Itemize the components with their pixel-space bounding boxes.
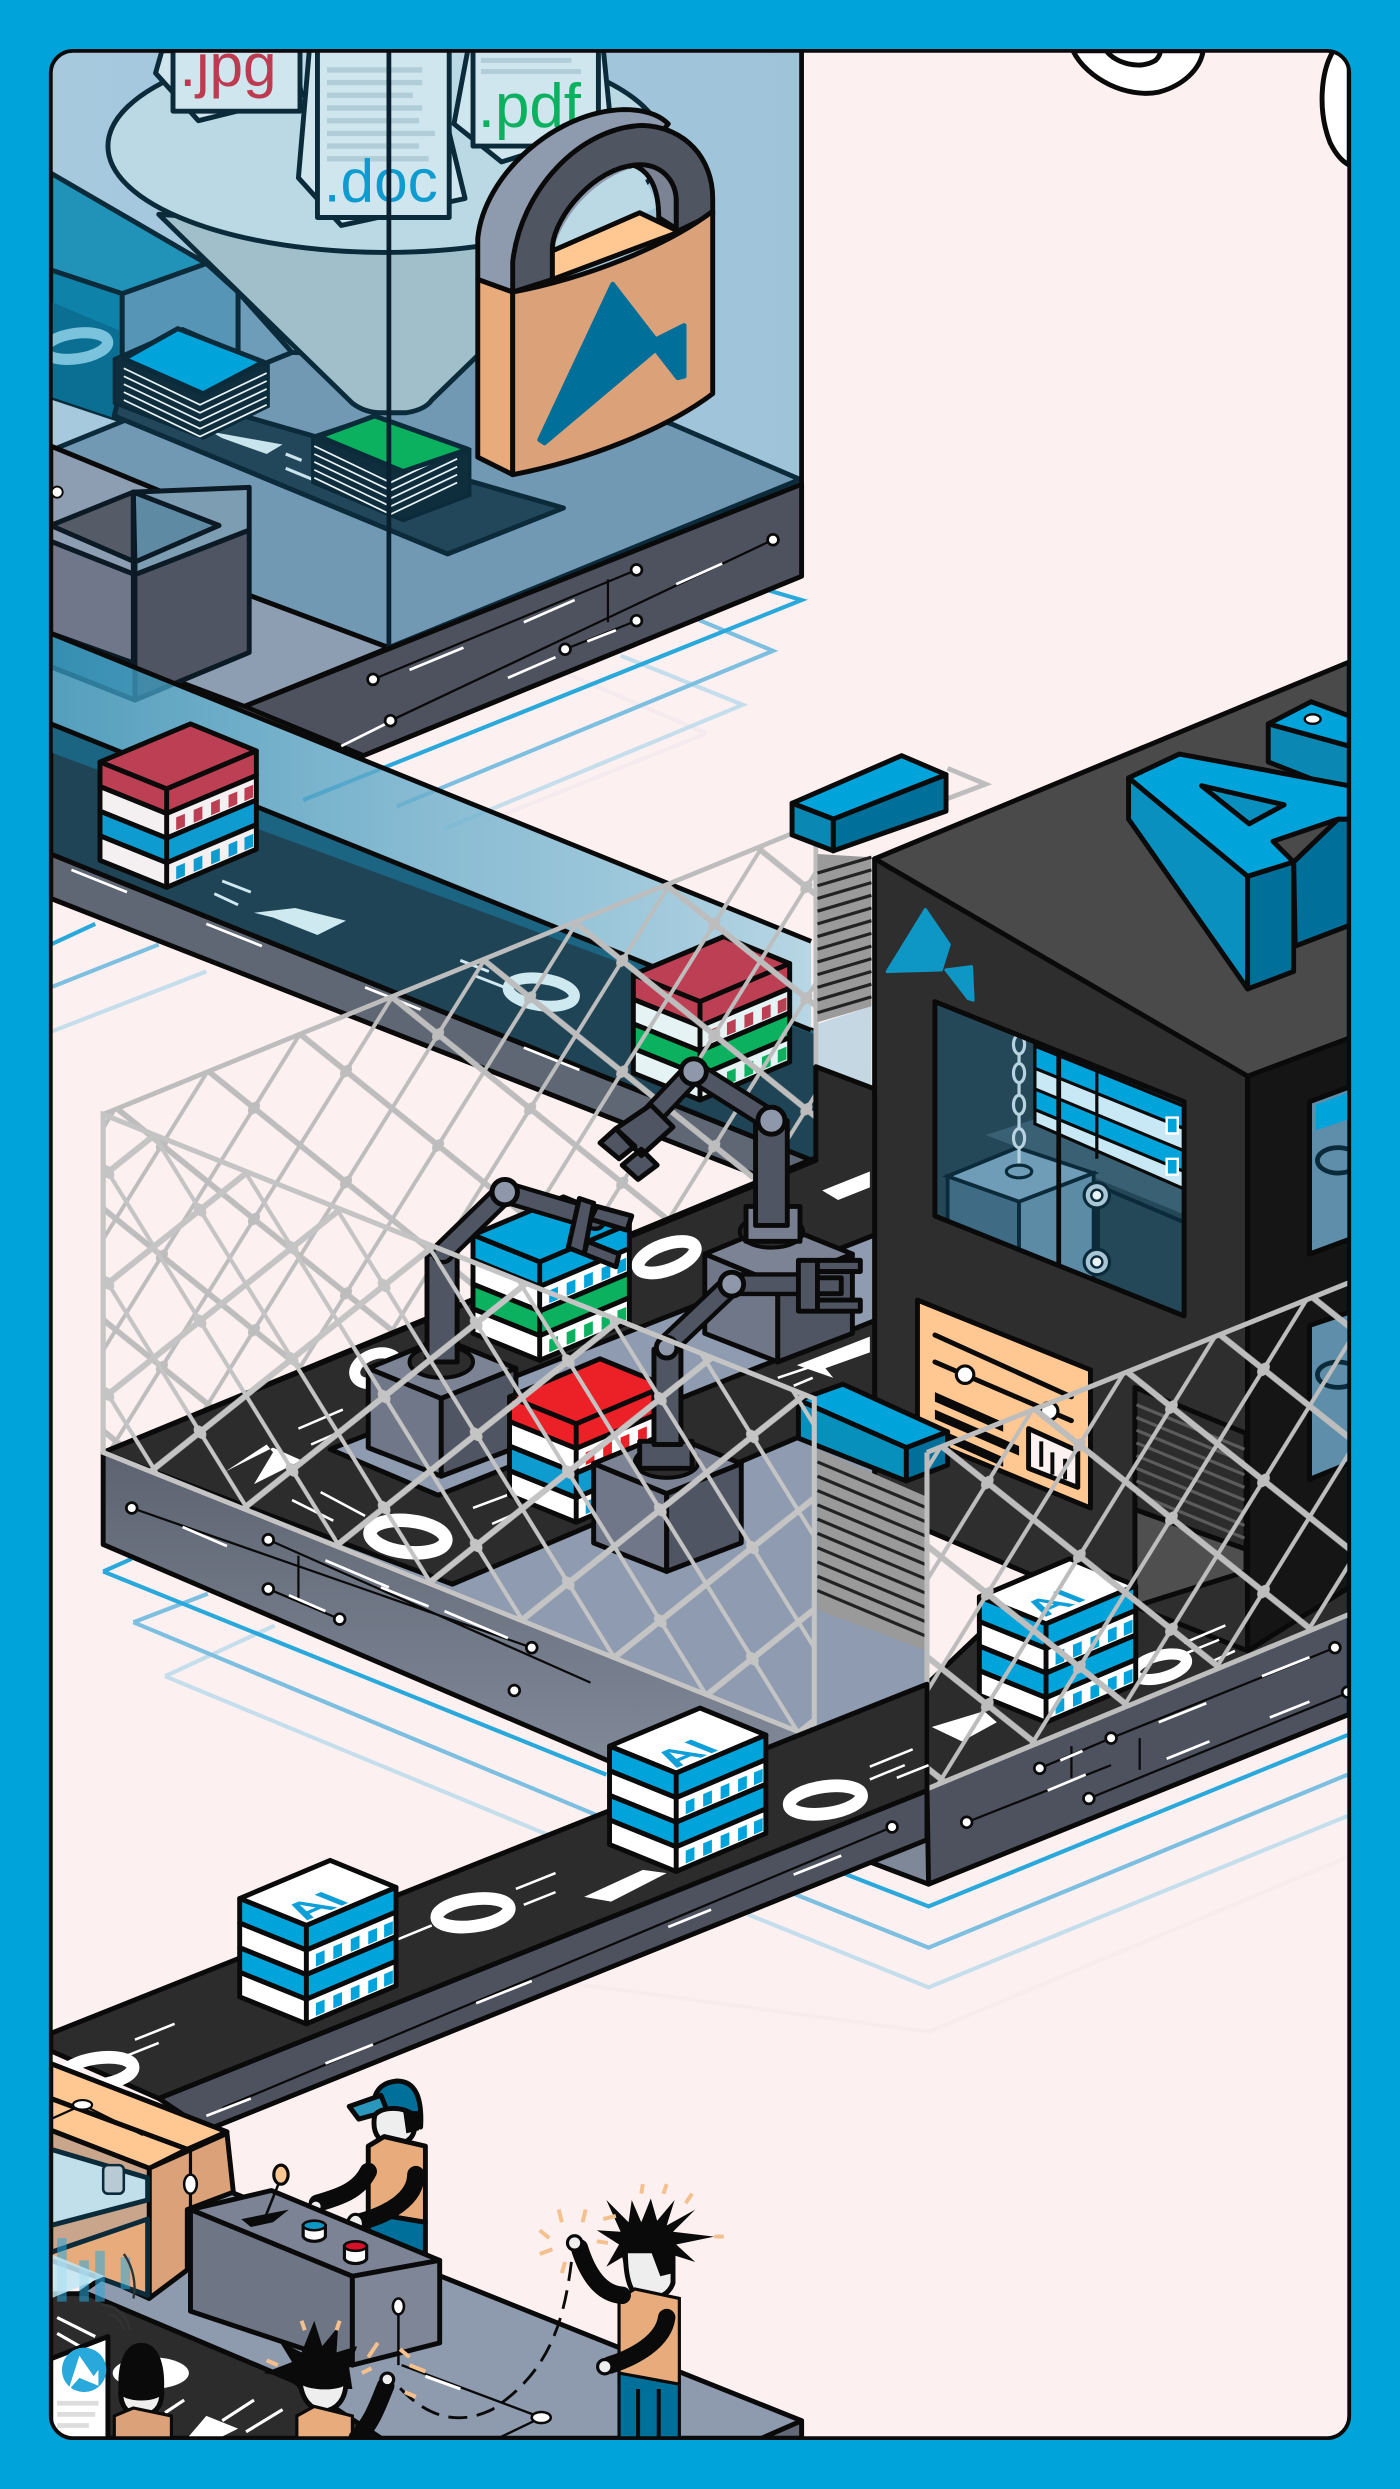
ghost chart xyxy=(57,2238,130,2302)
main window xyxy=(935,1002,1184,1316)
operator with blue cap xyxy=(310,2081,425,2254)
peach dashboard panel xyxy=(917,1300,1090,1508)
back shutter xyxy=(817,854,871,1022)
3D letter I xyxy=(1268,702,1349,794)
warehouse base xyxy=(244,484,802,756)
cable node xyxy=(397,2311,399,2365)
red cube with blue layers xyxy=(100,724,256,887)
padlock xyxy=(478,110,713,475)
lower black road xyxy=(51,2294,381,2438)
right platform xyxy=(870,1587,1353,1884)
pdf document: .pdf xyxy=(478,72,582,141)
floor xyxy=(54,352,800,648)
digits xyxy=(787,1782,863,1818)
blue floor shadow lines xyxy=(51,589,1348,2032)
glass back wall xyxy=(52,52,800,495)
3D letter A xyxy=(1129,754,1349,989)
blue button xyxy=(303,2225,325,2241)
lock logo xyxy=(540,284,684,443)
glass corner line xyxy=(387,51,390,648)
top right rounded object xyxy=(1322,51,1349,165)
robot arm B upper xyxy=(443,1179,632,1267)
leaflet with logo xyxy=(51,2337,108,2444)
left wall xyxy=(875,859,1248,1651)
right wall xyxy=(1248,1038,1349,1651)
wall logo xyxy=(887,910,973,1000)
lock body xyxy=(552,213,679,279)
grey floor xyxy=(51,446,389,706)
platform floor xyxy=(103,1133,927,1738)
spark cable xyxy=(394,2262,571,2418)
glass tint xyxy=(51,633,811,1032)
AI cube centre: AI xyxy=(640,1735,730,1772)
pdf document xyxy=(454,38,611,162)
glass conveyor section xyxy=(51,633,871,1198)
robot arm A xyxy=(600,1059,852,1362)
green paper stack xyxy=(313,416,470,521)
under block xyxy=(870,1810,929,1884)
shackle xyxy=(478,110,668,292)
right road xyxy=(927,1587,1349,1789)
AI cube left xyxy=(240,1860,396,2024)
rollers xyxy=(1095,1195,1099,1262)
digit zero xyxy=(506,974,576,1010)
spiky character bottom xyxy=(263,2321,425,2444)
right window lower xyxy=(1310,1311,1359,1479)
floor circuit xyxy=(402,2365,551,2438)
belt side xyxy=(51,854,816,1198)
front left fence xyxy=(103,1114,814,1738)
conveyor belt inside warehouse xyxy=(112,404,566,556)
back fence xyxy=(103,768,986,1452)
blue and green cube xyxy=(473,1197,629,1360)
lower floor xyxy=(79,2191,802,2438)
front shutter xyxy=(817,1449,927,1651)
belt road xyxy=(51,724,816,1162)
jpg document xyxy=(153,52,304,124)
doc document xyxy=(298,38,465,225)
AI cube in right cage: AI xyxy=(1011,1585,1097,1621)
side circuit xyxy=(132,1508,590,1683)
AI cube centre xyxy=(610,1708,766,1871)
front conveyor belt xyxy=(51,1684,929,2130)
front blue beam xyxy=(798,1384,948,1481)
AI cube in right cage xyxy=(979,1559,1136,1722)
platform side xyxy=(103,1452,889,1794)
belt side xyxy=(159,1791,927,2130)
person with black hair xyxy=(113,2343,189,2444)
peach building xyxy=(51,2064,233,2302)
storage box xyxy=(51,487,249,700)
teal back building xyxy=(51,173,292,421)
joystick xyxy=(241,2210,289,2227)
jpg document: .jpg xyxy=(179,31,277,99)
roof xyxy=(875,662,1349,1076)
robot arm B xyxy=(368,1254,516,1476)
platform front side xyxy=(927,1614,1349,1884)
belt road xyxy=(51,1684,927,2098)
control console xyxy=(190,2165,440,2365)
pale door panel xyxy=(817,1006,871,1092)
door with shutter xyxy=(1135,1076,1248,1651)
road marks xyxy=(215,433,282,454)
machine block xyxy=(948,1176,1019,1251)
AI factory building xyxy=(875,662,1359,1651)
glass warehouse at top xyxy=(43,31,802,756)
back blue beam xyxy=(792,756,946,851)
teal ring digit xyxy=(43,329,109,363)
spiky character right xyxy=(540,2184,724,2438)
blue paper stack xyxy=(114,329,268,438)
right fence xyxy=(927,1283,1349,1789)
funnel xyxy=(108,40,663,413)
digit one xyxy=(254,908,346,935)
red and green cube xyxy=(633,937,790,1100)
chain xyxy=(1013,1035,1025,1164)
wifi marks xyxy=(102,2254,135,2330)
AI cube left: AI xyxy=(270,1887,360,1924)
red button xyxy=(344,2246,367,2264)
right face xyxy=(149,2133,233,2298)
shop window xyxy=(51,2149,148,2225)
right window upper xyxy=(1310,1086,1359,1254)
sparks xyxy=(540,2184,724,2273)
top right ring fragment xyxy=(1073,51,1203,93)
central platform xyxy=(103,1067,927,1794)
black road xyxy=(103,1067,875,1584)
grey robot strip xyxy=(330,1235,875,1495)
robot arm C xyxy=(594,1260,860,1571)
road digits xyxy=(225,1171,870,1484)
shelved stack in window xyxy=(986,1119,1184,1214)
doc document: .doc xyxy=(324,147,438,215)
red cube on belt xyxy=(510,1359,666,1522)
roof bands xyxy=(51,2064,227,2149)
